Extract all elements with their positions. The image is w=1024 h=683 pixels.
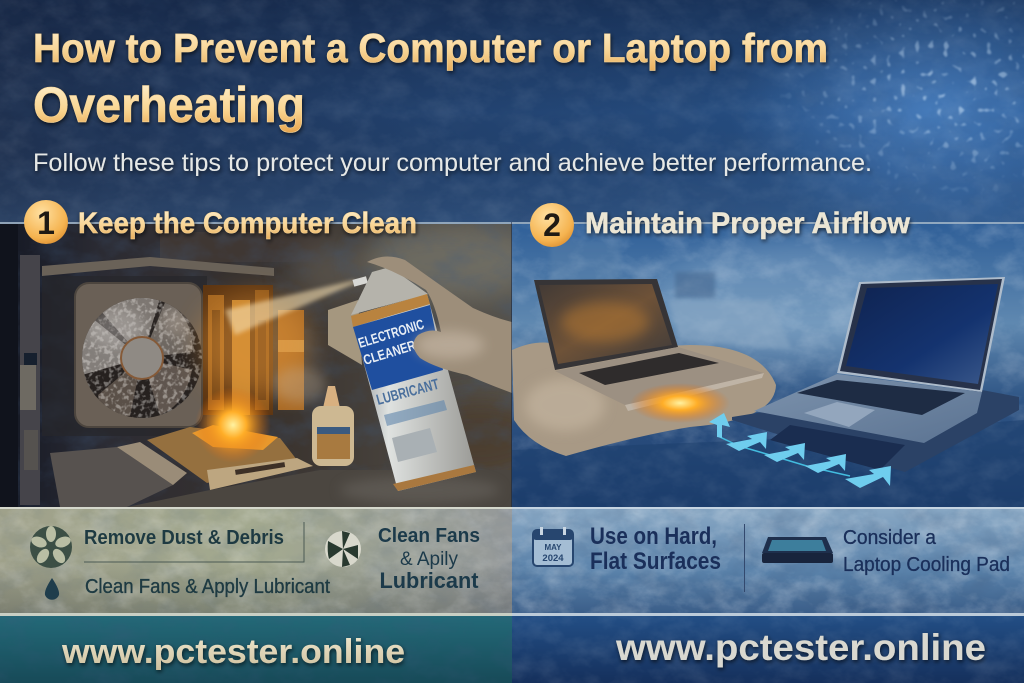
footer: left website	[0, 613, 512, 683]
tip text: remove dust: Remove Dust & Debris	[84, 527, 284, 549]
heading text: keep the computer clean: Keep the Computer Clean	[78, 207, 417, 240]
icon: cleaning fan	[325, 531, 361, 567]
icon: calendar: MAY	[544, 543, 562, 552]
icon: cooling pad	[762, 537, 833, 563]
tip text: use on hard flat surfaces: Use on Hard,	[590, 523, 717, 550]
subtitle: Follow these tips to protect your computer and achieve better performance.	[33, 149, 872, 177]
airflow arrows	[709, 413, 891, 488]
icon: oil drop	[45, 578, 59, 600]
footer: right website	[512, 613, 1024, 683]
cooling pad	[732, 390, 1019, 472]
overheating laptop	[534, 279, 764, 411]
lubricant bottle	[312, 386, 354, 466]
bracket line	[84, 522, 304, 562]
panel: keep the computer clean illustration	[0, 222, 550, 507]
gloved hand	[367, 256, 512, 393]
section divider lines	[0, 222, 1024, 507]
white box behind can	[328, 300, 362, 365]
spray can: LUBRICANT	[375, 376, 441, 409]
icon: fan	[30, 526, 72, 568]
case frame	[0, 224, 274, 507]
icon: calendar: 2024	[542, 553, 564, 564]
tip text: clean fans and apily lubricant	[378, 525, 480, 593]
tip text: clean fans and apily lubricant: Lubricant	[380, 568, 479, 593]
icon: number 2 badge: 2	[543, 207, 561, 243]
flames under laptop	[630, 383, 730, 423]
header background	[0, 0, 1024, 240]
vertical divider	[744, 524, 745, 592]
background desk	[550, 240, 792, 350]
heading: step 2	[530, 203, 911, 247]
panel: maintain proper airflow illustration	[512, 224, 1024, 507]
tip text: clean fans and apily lubricant: & Apily	[400, 549, 458, 570]
tip text: cooling pad	[843, 527, 1010, 576]
title: Overheating	[33, 77, 305, 133]
panel: right tips strip	[512, 507, 1024, 614]
footer: right website: www.pctester.online	[615, 627, 986, 668]
panel: left tips strip	[0, 507, 512, 614]
tip text: cooling pad: Laptop Cooling Pad	[843, 554, 1010, 576]
circuit board tower	[200, 285, 310, 415]
cool laptop	[754, 277, 1005, 443]
tip text: clean fans and apily lubricant: Clean Fans	[378, 525, 480, 547]
motherboard and glowing CPU	[50, 387, 512, 507]
spray can: CLEANER	[361, 337, 418, 368]
tip text: cooling pad: Consider a	[843, 527, 937, 549]
tip text: clean fans and apply lubricant: Clean Fans & Apply Lubricant	[85, 576, 330, 598]
icon: number 2 badge	[530, 203, 574, 247]
icon: dusty fan	[75, 283, 202, 427]
heading: step 1	[24, 200, 417, 244]
tip text: use on hard flat surfaces: Flat Surfaces	[590, 548, 721, 575]
spray can	[351, 267, 476, 491]
title	[33, 25, 828, 133]
pillow	[512, 342, 776, 456]
icon: number 1 badge: 1	[37, 205, 55, 241]
spray jet	[225, 280, 356, 335]
title: How to Prevent a Computer or Laptop from	[33, 25, 828, 71]
tip text: use on hard flat surfaces	[590, 523, 721, 575]
icon: number 1 badge	[24, 200, 68, 244]
footer: left website: www.pctester.online	[61, 633, 405, 671]
spray can: ELECTRONIC	[356, 316, 426, 351]
icon: calendar	[533, 527, 573, 566]
heading text: maintain proper airflow: Maintain Proper Airflow	[585, 207, 911, 240]
